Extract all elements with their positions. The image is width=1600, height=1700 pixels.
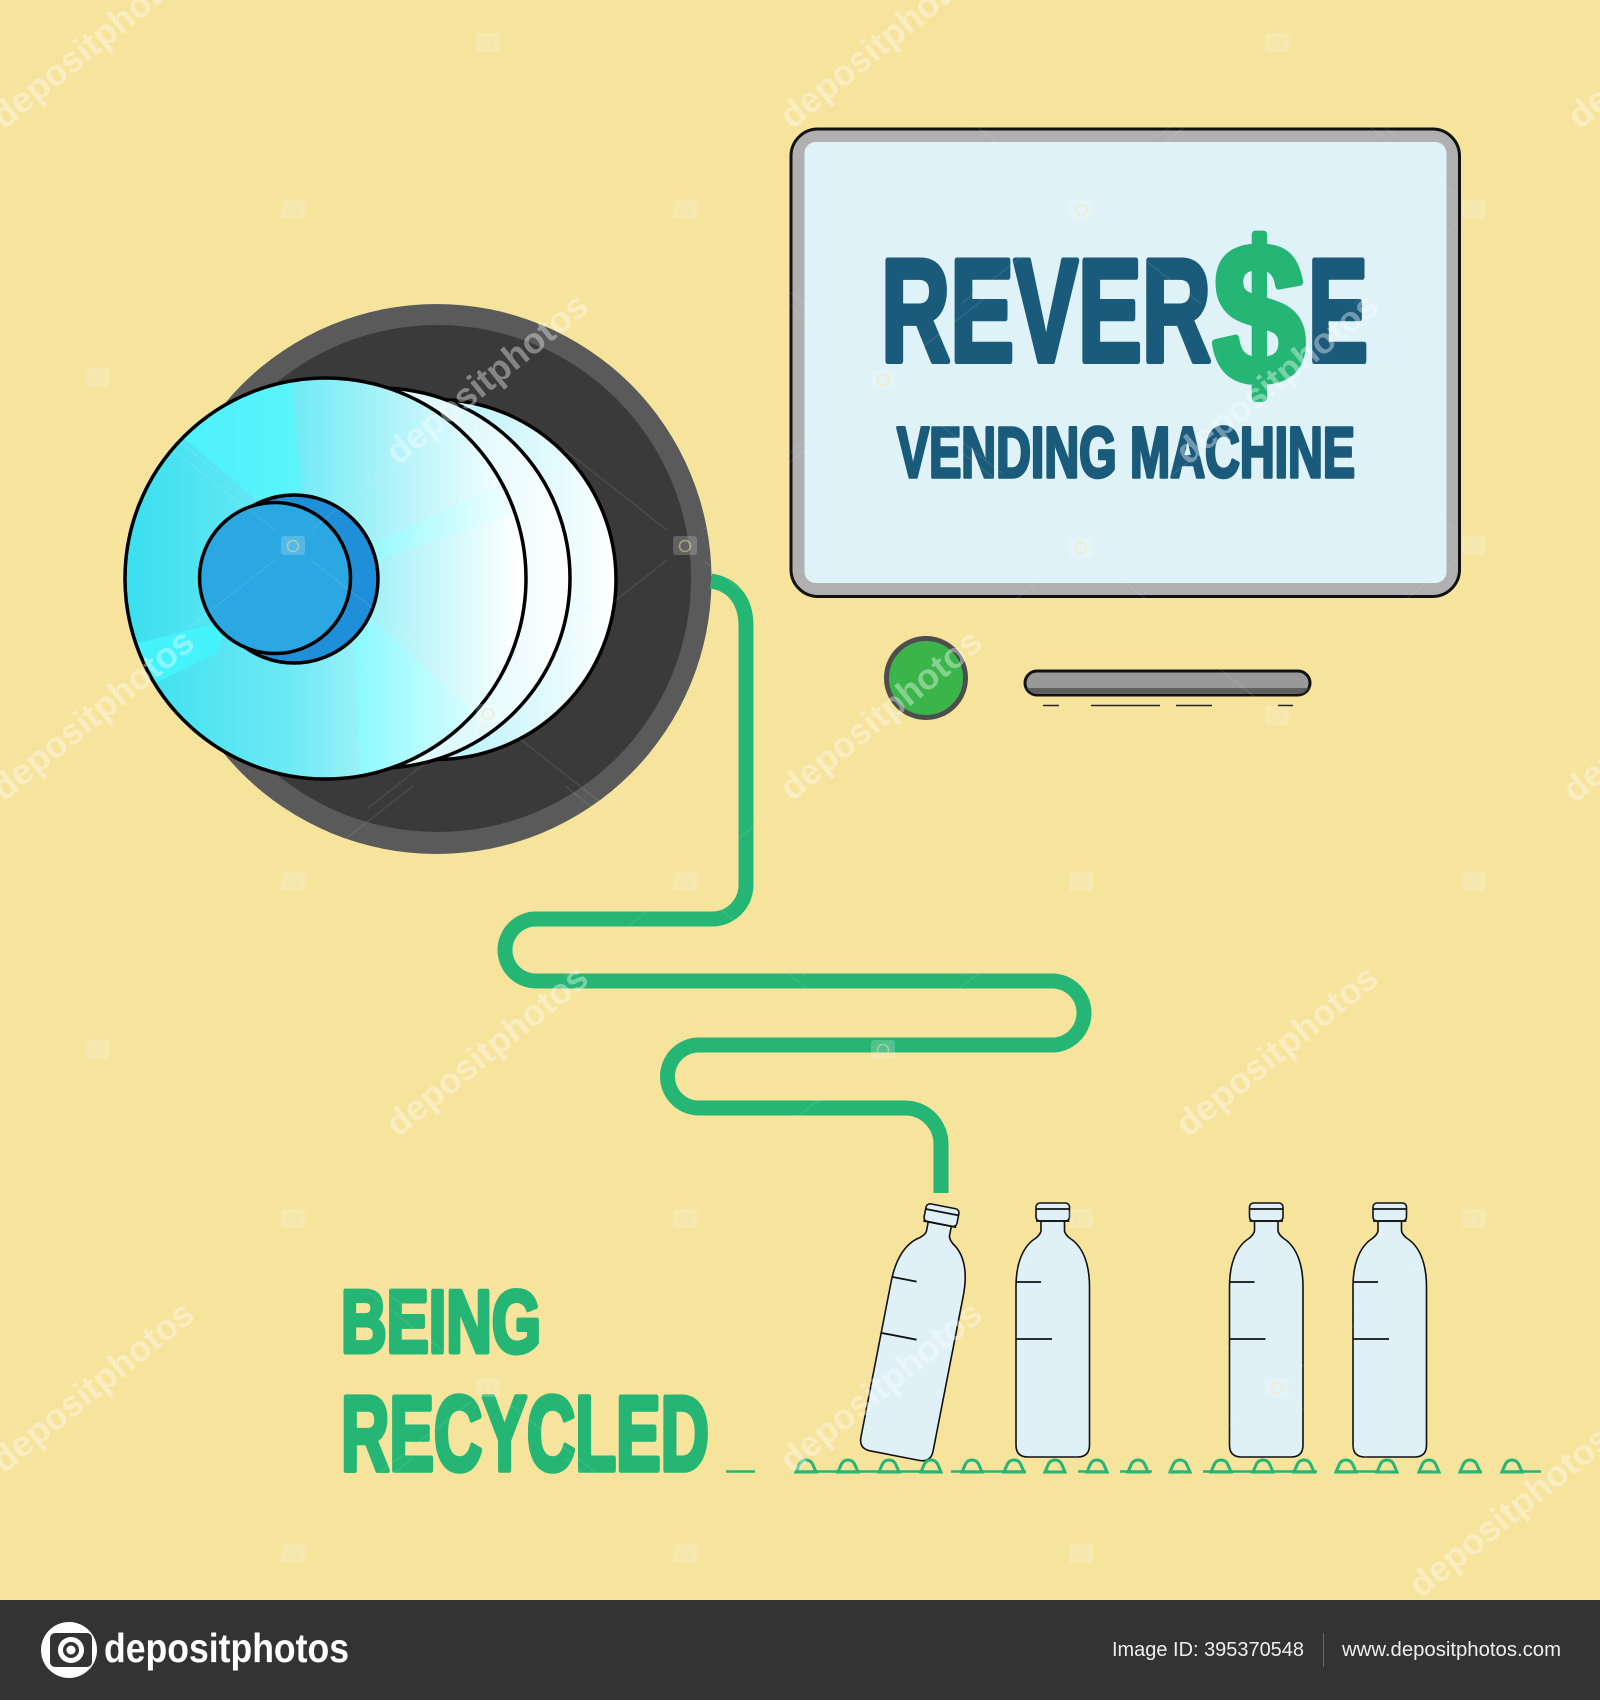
watermark: depositphotos repeated: depositphotos bbox=[771, 1292, 990, 1480]
heading: being recycled bbox=[341, 1272, 709, 1493]
watermark: depositphotos repeated: depositphotos bbox=[771, 620, 990, 808]
subtitle: vending machine: VENDING MACHINE bbox=[897, 414, 1355, 493]
watermark: depositphotos repeated: depositphotos bbox=[377, 284, 596, 472]
arrow: green conveyor pipe bbox=[505, 581, 1084, 1193]
website: www.depositphotos.com bbox=[1341, 1639, 1561, 1661]
watermark: depositphotos repeated: depositphotos bbox=[1167, 956, 1386, 1144]
bottle: second bbox=[1016, 1203, 1090, 1457]
image id: Image ID: 395370548 bbox=[1112, 1639, 1304, 1661]
icon: depositphotos camera logo bbox=[41, 1622, 97, 1678]
heading: being recycled: RECYCLED bbox=[341, 1375, 709, 1493]
heading: being recycled: BEING bbox=[341, 1272, 541, 1371]
watermark: depositphotos repeated: depositphotos bbox=[1167, 284, 1386, 472]
icon: bottle slot bbox=[1025, 671, 1310, 706]
bottle: fourth bbox=[1353, 1203, 1426, 1457]
icon: bottle intake disc bbox=[110, 304, 712, 854]
conveyor belt bbox=[726, 1460, 1541, 1472]
watermark: depositphotos repeated: depositphotos bbox=[377, 956, 596, 1144]
bottle: third bbox=[1230, 1203, 1303, 1457]
logo wordmark: depositphotos bbox=[104, 1625, 349, 1671]
title: REVERSE: $ bbox=[1213, 203, 1305, 426]
footer bar bbox=[0, 1600, 1600, 1700]
panel: vending machine screen bbox=[791, 129, 1460, 596]
bottle: tilted bbox=[859, 1199, 979, 1463]
title: REVERSE: E bbox=[1308, 229, 1368, 392]
icon: green button bbox=[886, 638, 966, 718]
title: REVERSE: REVER bbox=[881, 229, 1211, 392]
